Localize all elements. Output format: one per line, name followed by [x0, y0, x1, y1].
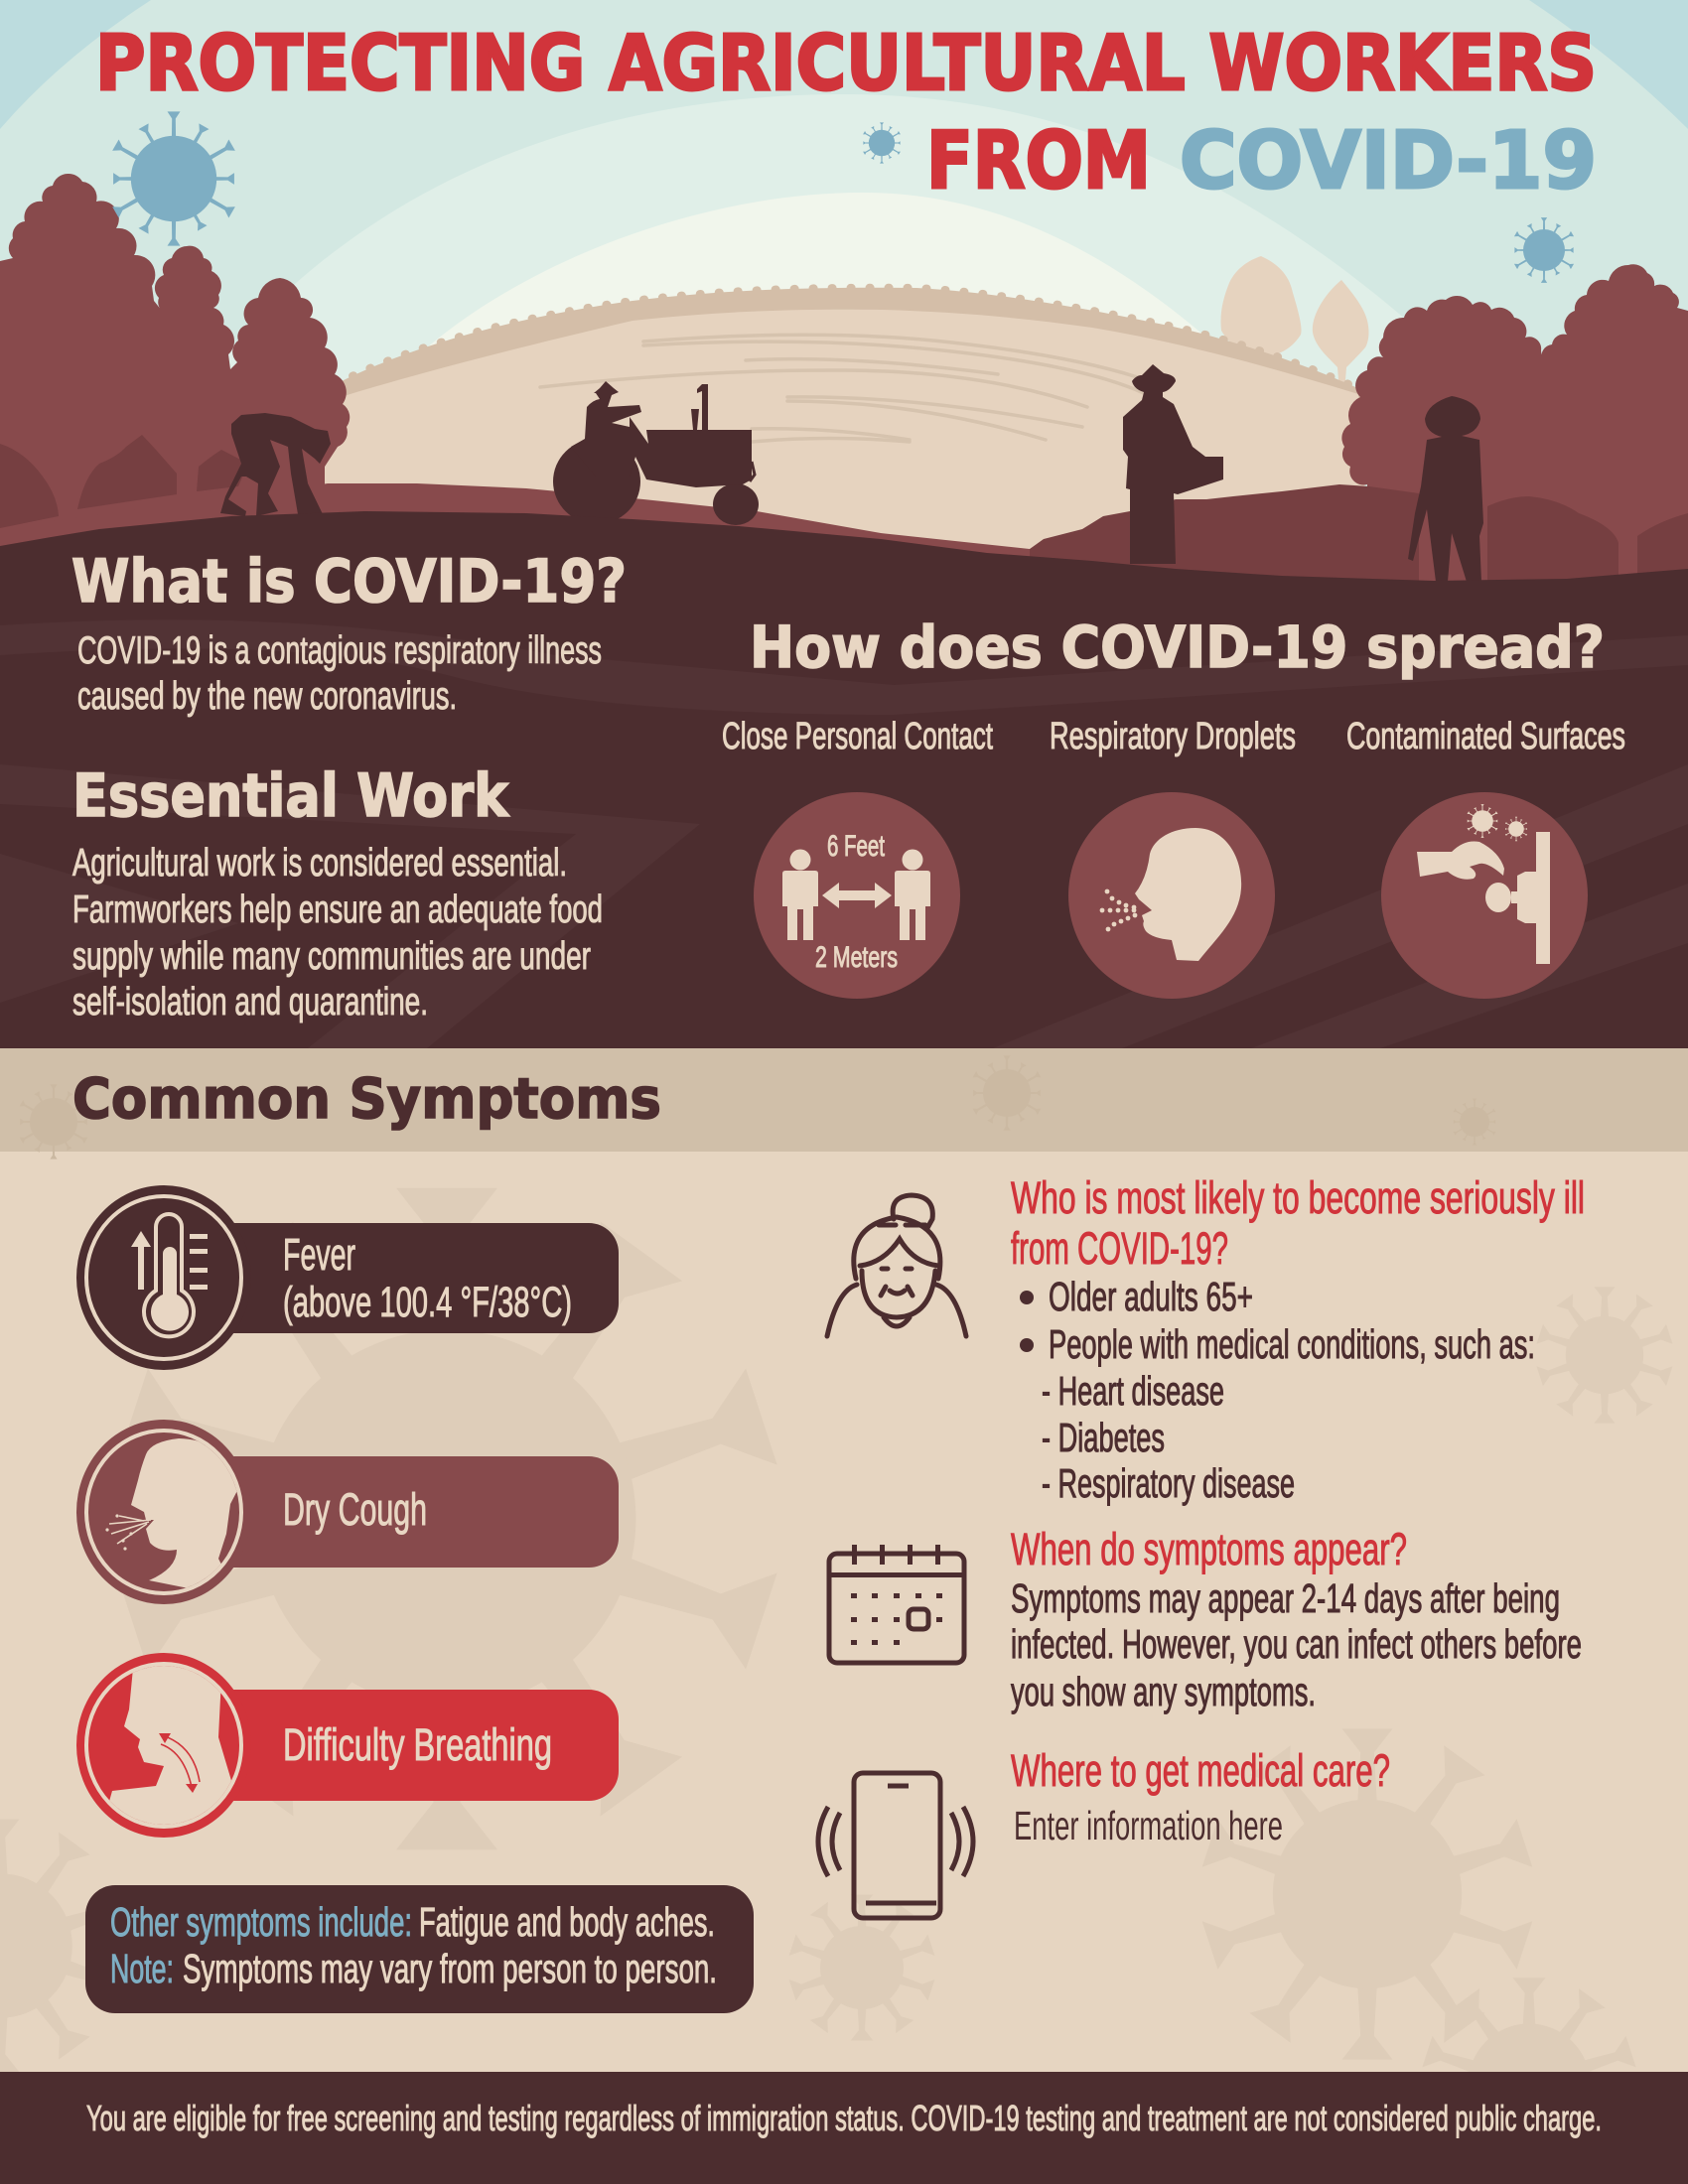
watermark viruses: [0, 1188, 1672, 2184]
panel: common symptoms band: [0, 1048, 1688, 1160]
icon: six feet distance: 6 Feet: [827, 830, 885, 863]
panel: fever: Fever: [283, 1229, 355, 1280]
callout: other symptoms: Note:: [110, 1946, 174, 1991]
title: FROM: [926, 115, 1151, 206]
text: where to get medical care: Where to get medical care?: [1011, 1745, 1390, 1796]
label: respiratory droplets: Respiratory Droplets: [1050, 716, 1296, 757]
icon: vibrating phone: [818, 1773, 973, 1918]
panel: dry cough: Dry Cough: [283, 1484, 427, 1535]
distant pale trees: [1220, 256, 1368, 392]
icon: thermometer: [131, 1214, 208, 1336]
callout: other symptoms: [85, 1885, 754, 2013]
icon: older woman: [827, 1195, 966, 1336]
text: when do symptoms appear: When do symptoms appear?: [1011, 1524, 1407, 1574]
icon: farmer bending: [220, 413, 331, 516]
lower bushes left: [0, 435, 248, 528]
panel: fever: [76, 1185, 619, 1370]
icon: breathing head: [109, 1666, 231, 1825]
text: essential work paragraph: Farmworkers help ensure an adequate food: [72, 888, 603, 931]
icon: six feet distance: 2 Meters: [815, 941, 898, 974]
text: who is most likely: [1011, 1172, 1585, 1506]
text: essential work paragraph: supply while many communities are under: [72, 935, 591, 978]
heading: common symptoms: Common Symptoms: [72, 1067, 661, 1132]
text: who is most likely: - Respiratory disease: [1042, 1460, 1295, 1506]
text: definition: caused by the new coronavirus.: [77, 675, 457, 718]
icon: farmer with basket: [1123, 364, 1223, 564]
label: close personal contact: Close Personal Contact: [722, 716, 993, 757]
heading: Essential Work: Essential Work: [72, 761, 510, 831]
hedge right: [1030, 484, 1419, 606]
text: definition: COVID-19 is a contagious respiratory illness: [77, 629, 602, 672]
callout: other symptoms: Other symptoms include:: [110, 1899, 412, 1945]
text: who is most likely: - Heart disease: [1042, 1368, 1224, 1414]
icon: calendar: [829, 1545, 964, 1663]
panel: symptoms background: [0, 1048, 1688, 2184]
callout: other symptoms: Symptoms may vary from person to person.: [183, 1946, 717, 1991]
title: COVID-19: [1180, 115, 1597, 206]
panel: fever: (above 100.4 °F/38°C): [283, 1279, 572, 1326]
text: when do symptoms appear: you show any symptoms.: [1011, 1669, 1316, 1714]
icon: virus right: [1514, 217, 1574, 283]
icon: six feet distance: [754, 792, 960, 999]
text: essential work paragraph: [72, 842, 603, 1024]
text: who is most likely: - Diabetes: [1042, 1415, 1165, 1460]
left tree line: [0, 174, 350, 556]
icon: farmer with tool: [1408, 396, 1483, 582]
text: essential work paragraph: self-isolation and quarantine.: [72, 981, 428, 1024]
panel: dry cough: [76, 1420, 619, 1604]
icon: small virus top: [863, 122, 901, 164]
text: definition: [77, 629, 602, 718]
icon: coughing head: [131, 1438, 236, 1588]
panel: difficulty breathing: Difficulty Breathing: [283, 1719, 552, 1770]
text: who is most likely: from COVID-19?: [1011, 1223, 1228, 1274]
text: who is most likely: Older adults 65+: [1049, 1274, 1253, 1319]
lower bushes right: [1487, 496, 1688, 586]
title: [95, 20, 1597, 206]
heading: How does COVID-19 spread: How does COVID-19 spread?: [750, 614, 1605, 681]
callout: other symptoms: Fatigue and body aches.: [419, 1899, 715, 1945]
scalloped hill: [298, 288, 1370, 566]
text: when do symptoms appear: [1011, 1524, 1582, 1714]
heading: What is COVID-19: What is COVID-19?: [71, 547, 627, 616]
text: essential work paragraph: Agricultural work is considered essential.: [72, 842, 567, 885]
right tree line: [1341, 264, 1688, 615]
icon: large virus: [112, 111, 235, 246]
panel: footer: [0, 2072, 1688, 2184]
icon: contaminated door knob: [1381, 792, 1588, 999]
mid hill: [0, 483, 1030, 606]
icon: respiratory droplets head: [1068, 792, 1275, 999]
panel: hero landscape: [0, 0, 1688, 615]
text: where to get medical care: Enter information here: [1014, 1803, 1283, 1848]
icon: tractor: [553, 381, 759, 525]
text: where to get medical care: [1011, 1745, 1390, 1848]
panel: dark information section: [0, 511, 1688, 1048]
panel: difficulty breathing: [76, 1653, 619, 1838]
